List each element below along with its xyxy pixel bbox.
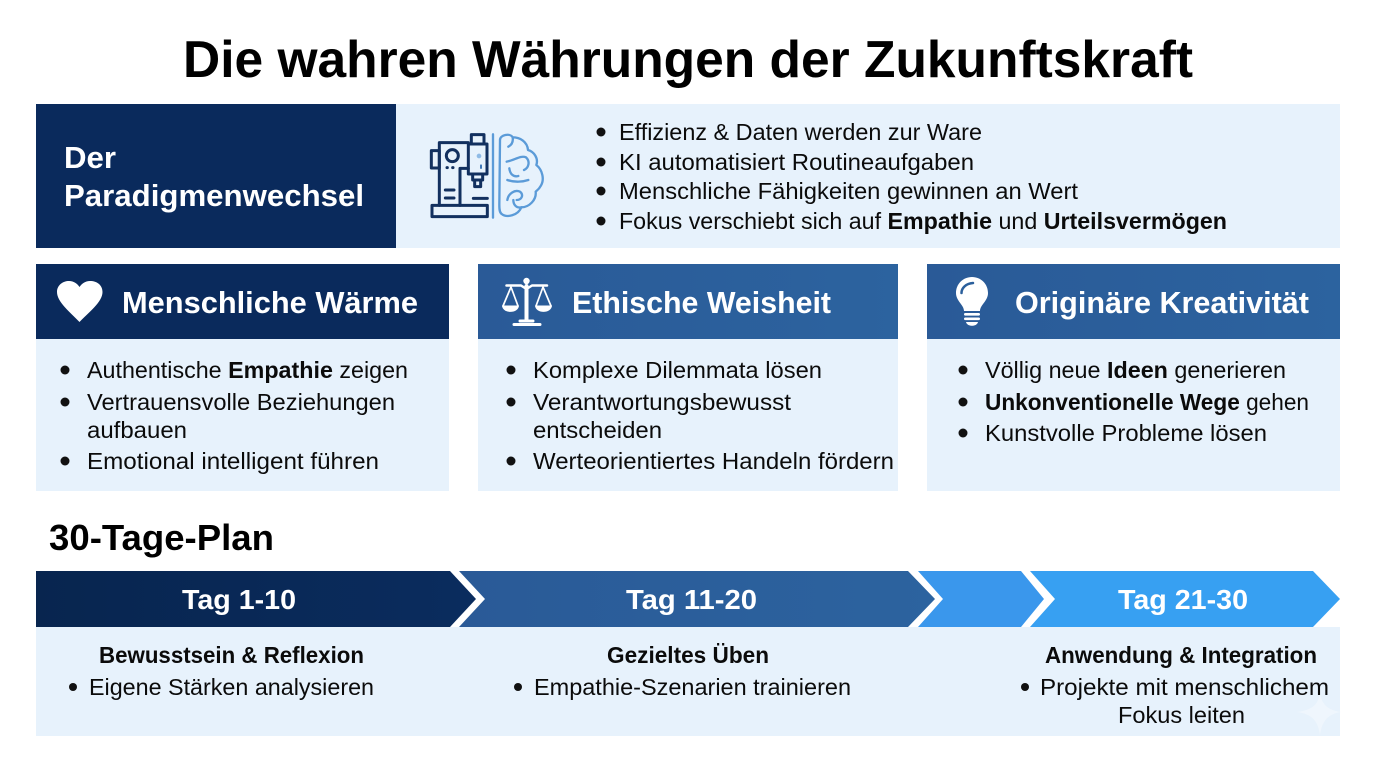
bullet list: Menschliche Wärme: Emotional intelligent führen bbox=[87, 448, 379, 474]
icon: heart bbox=[57, 281, 102, 322]
icon: machine and brain bbox=[431, 134, 543, 218]
phase text: Bewusstsein & Reflexion bbox=[69, 642, 374, 700]
bullet list: Menschliche Wärme: Vertrauensvolle Beziehungen bbox=[87, 389, 395, 415]
panel: Originäre Kreativität bbox=[927, 264, 1340, 491]
arrow: Tag 11-20: Tag 11-20 bbox=[626, 584, 757, 615]
bullet list: Originäre Kreativität: Kunstvolle Probleme lösen bbox=[985, 420, 1267, 446]
icon: light bulb bbox=[956, 277, 988, 326]
arrow: Tag 11-20 bbox=[459, 571, 935, 627]
panel: Ethische Weisheit bbox=[478, 264, 898, 491]
heading block: Der Paradigmenwechsel: Der bbox=[64, 140, 116, 175]
panel: paradigm shift bbox=[36, 104, 1340, 248]
sparkle watermark bbox=[1297, 693, 1341, 735]
bullet list: paradigm shift: KI automatisiert Routineaufgaben bbox=[619, 149, 974, 175]
bullet list: Originäre Kreativität: Völlig neue Ideen generieren bbox=[985, 357, 1286, 383]
title: Die wahren Währungen der Zukunftskraft bbox=[183, 31, 1193, 89]
phase text: Anwendung & Integration: Anwendung & Integration bbox=[1045, 642, 1317, 668]
arrow: Tag 21-30 bbox=[1030, 571, 1340, 627]
card heading: Menschliche Wärme: Menschliche Wärme bbox=[122, 285, 418, 320]
timeline panel bbox=[36, 571, 1341, 736]
arrow: connector segment bbox=[918, 571, 1044, 627]
bullet list: Ethische Weisheit: Verantwortungsbewusst bbox=[533, 389, 792, 415]
bullet list: Menschliche Wärme bbox=[60, 357, 408, 474]
phase text: Gezieltes Üben bbox=[514, 642, 851, 700]
bullet list: Originäre Kreativität bbox=[958, 357, 1309, 446]
arrow: Tag 1-10 bbox=[36, 571, 476, 627]
arrow: Tag 21-30: Tag 21-30 bbox=[1118, 584, 1248, 615]
heading block: Der Paradigmenwechsel bbox=[36, 104, 396, 248]
bullet list: Ethische Weisheit: Komplexe Dilemmata lösen bbox=[533, 357, 822, 383]
phase text: Bewusstsein & Reflexion: Eigene Stärken analysieren bbox=[89, 674, 374, 700]
section heading: 30-Tage-Plan: 30-Tage-Plan bbox=[49, 517, 274, 558]
bullet list: paradigm shift: Fokus verschiebt sich auf Empathie und Urteilsvermögen bbox=[619, 208, 1227, 234]
card heading: Originäre Kreativität: Originäre Kreativität bbox=[1015, 285, 1309, 320]
bullet list: Ethische Weisheit: entscheiden bbox=[533, 417, 662, 443]
icon: scales bbox=[502, 278, 552, 324]
bullet list: paradigm shift bbox=[596, 119, 1227, 234]
phase text: Gezieltes Üben: Gezieltes Üben bbox=[607, 642, 769, 668]
heading block: Der Paradigmenwechsel: Paradigmenwechsel bbox=[64, 178, 364, 213]
bullet list: Menschliche Wärme: aufbauen bbox=[87, 417, 187, 443]
card heading: Ethische Weisheit: Ethische Weisheit bbox=[572, 285, 831, 320]
phase text: Anwendung & Integration: Projekte mit menschlichem bbox=[1040, 674, 1329, 700]
bullet list: Menschliche Wärme: Authentische Empathie zeigen bbox=[87, 357, 408, 383]
panel: Menschliche Wärme bbox=[36, 264, 449, 491]
phase text: Bewusstsein & Reflexion: Bewusstsein & Reflexion bbox=[99, 642, 364, 668]
bullet list: Ethische Weisheit: Werteorientiertes Handeln fördern bbox=[533, 448, 894, 474]
bullet list: Ethische Weisheit bbox=[506, 357, 894, 474]
bullet list: paradigm shift: Effizienz & Daten werden zur Ware bbox=[619, 119, 982, 145]
arrow: Tag 1-10: Tag 1-10 bbox=[182, 584, 296, 615]
phase text: Gezieltes Üben: Empathie-Szenarien trainieren bbox=[534, 674, 851, 700]
phase text: Anwendung & Integration: Fokus leiten bbox=[1118, 702, 1245, 728]
phase text: Anwendung & Integration bbox=[1021, 642, 1329, 728]
bullet list: Originäre Kreativität: Unkonventionelle Wege gehen bbox=[985, 389, 1309, 415]
bullet list: paradigm shift: Menschliche Fähigkeiten gewinnen an Wert bbox=[619, 178, 1079, 204]
